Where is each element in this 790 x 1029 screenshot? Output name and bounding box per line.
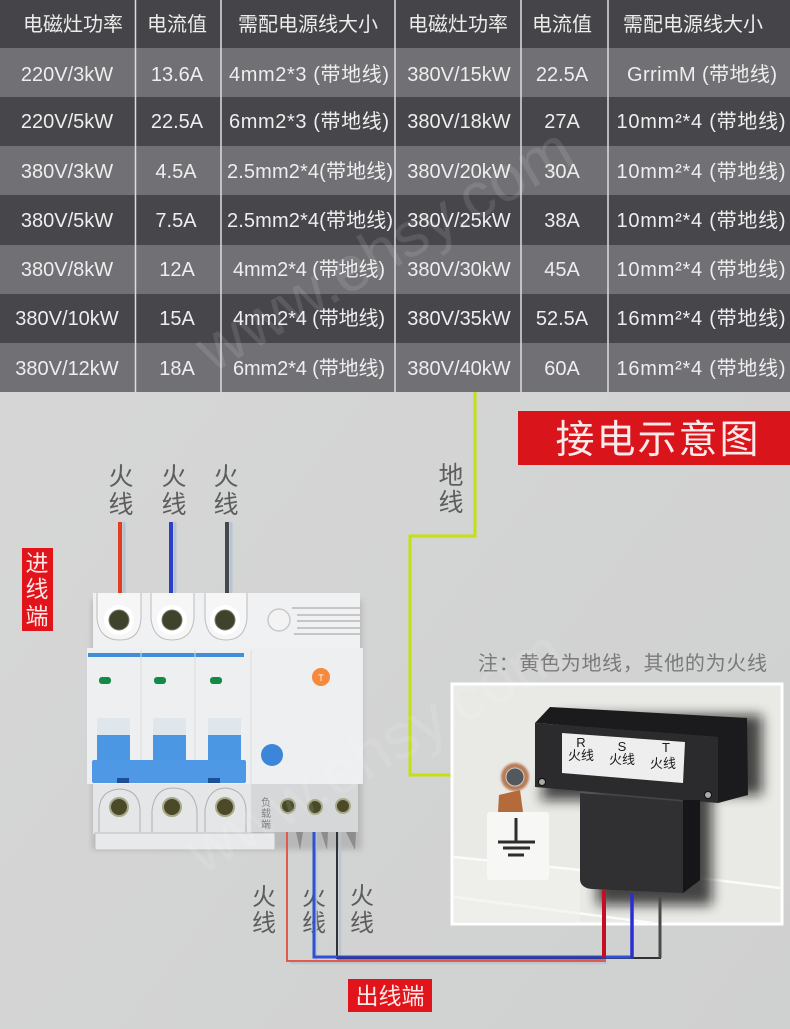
blue switch handles [92,718,246,783]
table data rows: 18A [159,358,195,380]
table data rows: 220V/3kW [21,64,113,86]
table data rows: 380V/30kW [407,259,511,281]
table data rows: 45A [544,259,580,281]
table header row: 电磁灶功率 [23,13,123,36]
table data rows: 380V/35kW [407,308,511,330]
junction box label [562,733,685,783]
table data rows: 10mm²*4 (带地线) [616,209,786,232]
table data rows: 15A [159,308,195,330]
table data rows: 380V/5kW [21,210,113,232]
table data rows: 22.5A [151,111,204,133]
label: input live wires: 线 [108,491,134,519]
label: input terminal: 端 [26,603,48,629]
table data rows: 52.5A [536,308,589,330]
breaker bottom terminal block: 载 [261,808,271,820]
breaker bottom terminal block: 负 [261,796,271,809]
label: output terminal: 出线端 [356,983,424,1009]
table data rows: 12A [159,259,195,281]
table data rows: 380V/25kW [407,210,511,232]
input wires [120,522,231,594]
table data rows: 380V/10kW [15,308,119,330]
breaker body: T [318,673,324,683]
table header row: 电磁灶功率 [408,13,508,36]
label: input live wires: 火 [213,463,239,491]
watermark: www.ehsy.com [172,614,575,888]
table header row: 需配电源线大小 [623,13,763,36]
circuit breaker [87,593,363,850]
table data rows: 10mm²*4 (带地线) [616,160,786,183]
table data rows: 4mm2*3 (带地线) [229,63,389,86]
table data rows: 38A [544,210,580,232]
watermark [172,112,585,888]
table data rows: 4mm2*4 (带地线) [233,307,385,330]
note: 注：黄色为地线，其他的为火线 [478,652,767,675]
label: ground wire: 地 [438,462,464,490]
label: input live wires [108,463,239,519]
photo wires [604,890,660,958]
breaker bottom terminal block [93,784,358,850]
table data rows: 380V/40kW [407,358,511,380]
junction box label: R [576,735,586,750]
table data rows: 10mm²*4 (带地线) [616,258,786,281]
label: ground wire: 线 [438,489,464,517]
label: input live wires: 线 [161,491,187,519]
table data rows: 13.6A [151,64,204,86]
junction box [535,707,748,893]
breaker top terminal block [93,593,360,655]
label: output live wires: 火 [350,883,374,910]
table data rows: 6mm2*4 (带地线) [233,357,385,380]
table data rows: 380V/12kW [15,358,119,380]
label: output live wires: 火 [252,884,276,911]
label: output live wires [252,883,374,937]
label: input terminal [22,548,53,631]
label: input terminal: 进 [26,550,48,576]
table data rows: 2.5mm2*4(带地线) [227,160,393,183]
junction box label: T [662,740,670,755]
table data rows: 7.5A [155,210,197,232]
ground wire [410,392,505,775]
table data rows: 2.5mm2*4(带地线) [227,209,393,232]
junction box label: 火线 [568,748,594,763]
table data rows: 16mm²*4 (带地线) [616,357,786,380]
watermark: www.ehsy.com [182,112,585,386]
label: input live wires: 火 [108,463,134,491]
table data rows: GrrimM (带地线) [627,63,777,86]
table data rows: 4mm2*4 (带地线) [233,258,385,281]
label: output live wires: 线 [350,910,374,937]
photo: ground terminal and junction box [452,684,782,924]
table data rows: 22.5A [536,64,589,86]
ground lug [498,763,529,812]
output wires [287,832,660,963]
label: input live wires: 线 [213,491,239,519]
table [0,0,790,392]
title banner: 接电示意图 [555,419,761,462]
table data rows: 380V/15kW [407,64,511,86]
breaker bottom terminal block: 端 [261,818,271,831]
junction box label: S [618,739,627,754]
table data rows [15,63,786,380]
label: input terminal: 线 [26,576,48,602]
table header row: 电流值 [532,13,592,36]
label: output live wires: 线 [252,910,276,937]
table data rows: 16mm²*4 (带地线) [616,307,786,330]
label: output terminal [348,979,432,1012]
junction box label: 火线 [650,756,676,771]
ground symbol label [487,812,549,880]
table header row [23,13,763,36]
table header row: 需配电源线大小 [238,13,378,36]
label: input live wires: 火 [161,463,187,491]
table data rows: 380V/18kW [407,111,511,133]
label: output live wires: 线 [302,910,326,937]
junction box shadow [540,715,762,905]
table data rows: 380V/8kW [21,259,113,281]
breaker body [87,648,363,784]
table data rows: 380V/3kW [21,161,113,183]
junction box label: 火线 [609,752,635,767]
table data rows: 27A [544,111,580,133]
table data rows: 6mm2*3 (带地线) [229,110,389,133]
table header row: 电流值 [147,13,207,36]
table data rows: 10mm²*4 (带地线) [616,110,786,133]
table data rows: 220V/5kW [21,111,113,133]
title banner [518,411,790,465]
table data rows: 4.5A [155,161,197,183]
table data rows: 60A [544,358,580,380]
label: output live wires: 火 [302,884,326,911]
table data rows: 380V/20kW [407,161,511,183]
label: ground wire [438,462,464,517]
table data rows: 30A [544,161,580,183]
